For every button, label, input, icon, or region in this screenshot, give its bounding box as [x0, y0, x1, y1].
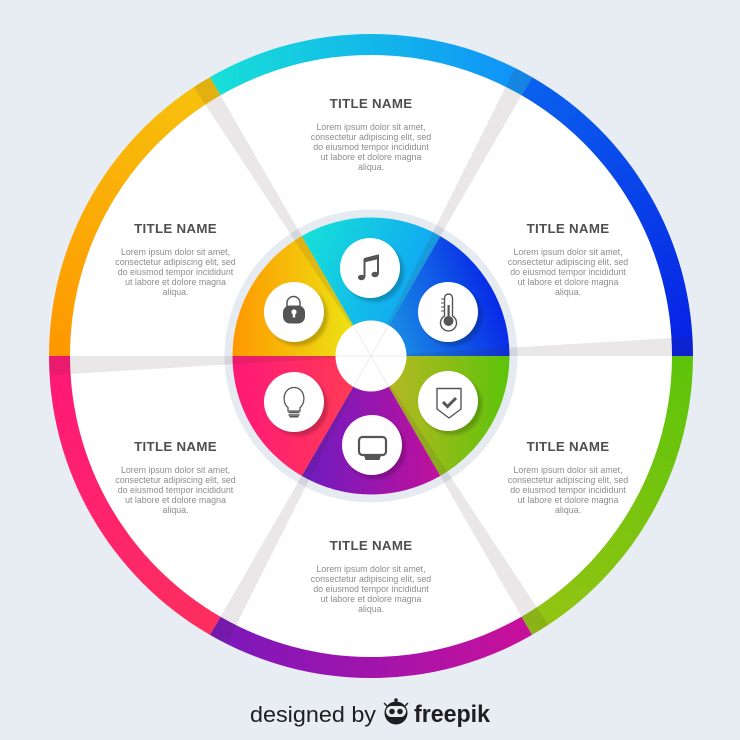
body text: aliqua.	[358, 162, 384, 172]
body text: ut labore et dolore magna	[518, 277, 618, 287]
icon: shield with check	[418, 371, 482, 435]
body text: aliqua.	[358, 604, 384, 614]
ring segment: pink	[49, 356, 220, 635]
ring segment: purple	[210, 617, 532, 678]
text block: lower right	[508, 439, 628, 515]
pie wedge: teal	[302, 218, 440, 356]
body text: do eiusmod tempor incididunt	[118, 485, 234, 495]
ring segment: blue	[522, 77, 693, 356]
pie wedge: purple	[302, 356, 440, 494]
body text: consectetur adipiscing elit, sed	[115, 475, 236, 485]
body text: do eiusmod tempor incididunt	[118, 267, 234, 277]
body text: consectetur adipiscing elit, sed	[311, 574, 431, 584]
icon: music note	[340, 238, 404, 302]
ring segment: orange	[49, 77, 220, 356]
footer credit	[250, 698, 491, 728]
body text: consectetur adipiscing elit, sed	[508, 475, 628, 485]
body text: consectetur adipiscing elit, sed	[311, 132, 431, 142]
brand name: freepik	[414, 701, 491, 728]
body text: Lorem ipsum dolor sit amet,	[316, 122, 426, 132]
pie wedge: orange	[232, 236, 371, 356]
body text: aliqua.	[162, 287, 189, 297]
outer colour ring	[49, 34, 693, 678]
body text: Lorem ipsum dolor sit amet,	[121, 247, 230, 257]
heading: TITLE NAME	[330, 538, 412, 553]
inner colour pie	[232, 218, 510, 494]
credit text: designed by	[250, 702, 376, 727]
body text: do eiusmod tempor incididunt	[313, 584, 429, 594]
icon: padlock	[264, 282, 328, 346]
center hub	[336, 320, 406, 392]
body text: consectetur adipiscing elit, sed	[115, 257, 236, 267]
inner pie halo	[224, 210, 518, 502]
body text: do eiusmod tempor incididunt	[510, 485, 626, 495]
body text: ut labore et dolore magna	[125, 495, 226, 505]
pie wedge: blue	[371, 236, 510, 356]
body text: ut labore et dolore magna	[518, 495, 618, 505]
body text: do eiusmod tempor incididunt	[313, 142, 429, 152]
body text: Lorem ipsum dolor sit amet,	[513, 247, 623, 257]
radial divider shadows	[49, 68, 693, 644]
white inner disc	[69, 54, 673, 658]
heading: TITLE NAME	[527, 221, 609, 236]
heading: TITLE NAME	[134, 439, 217, 454]
pie wedge: pink	[232, 356, 371, 476]
body text: aliqua.	[555, 287, 581, 297]
body text: do eiusmod tempor incididunt	[510, 267, 626, 277]
ring segment: green	[522, 356, 693, 635]
pie wedge: green	[371, 356, 510, 476]
body text: aliqua.	[555, 505, 581, 515]
icon: thermometer	[418, 282, 482, 346]
ring segment: teal	[210, 34, 532, 95]
body text: Lorem ipsum dolor sit amet,	[121, 465, 230, 475]
heading: TITLE NAME	[330, 96, 412, 111]
body text: ut labore et dolore magna	[321, 594, 421, 604]
body text: consectetur adipiscing elit, sed	[508, 257, 628, 267]
icon: freepik logo	[384, 698, 408, 724]
body text: ut labore et dolore magna	[321, 152, 421, 162]
icon: light bulb	[264, 372, 328, 436]
heading: TITLE NAME	[527, 439, 609, 454]
heading: TITLE NAME	[134, 221, 217, 236]
text block: bottom	[311, 538, 431, 614]
text block: upper left	[115, 221, 236, 297]
body text: Lorem ipsum dolor sit amet,	[316, 564, 426, 574]
text block: lower left	[115, 439, 236, 515]
body text: Lorem ipsum dolor sit amet,	[513, 465, 623, 475]
text block: top	[311, 96, 431, 172]
body text: ut labore et dolore magna	[125, 277, 226, 287]
body text: aliqua.	[162, 505, 189, 515]
icon: monitor	[342, 415, 406, 479]
text block: upper right	[508, 221, 628, 297]
